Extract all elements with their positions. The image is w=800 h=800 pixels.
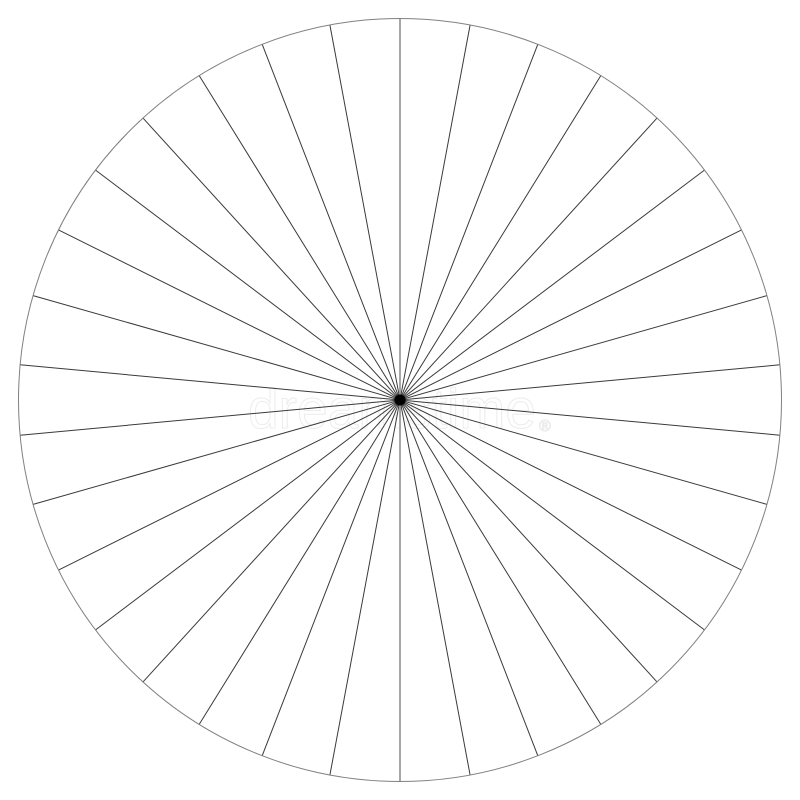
spoke: vertical line [399, 18, 401, 782]
watermark text: ® [539, 418, 551, 435]
watermark text: dreamstime [248, 377, 536, 440]
center hub [394, 394, 406, 406]
